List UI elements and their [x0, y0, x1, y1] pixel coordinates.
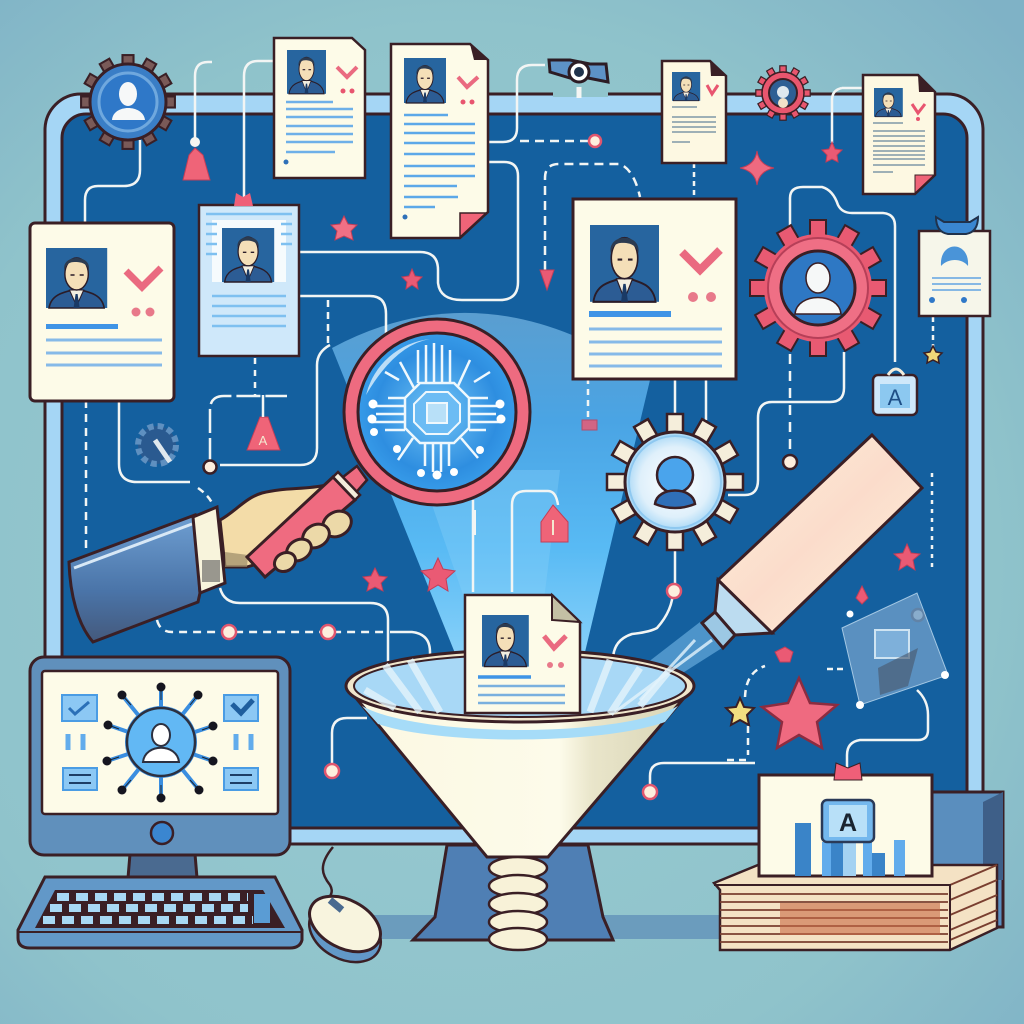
highlighter marker — [702, 435, 922, 648]
hand holding magnifier — [69, 472, 360, 642]
desk band — [370, 915, 730, 939]
computer mouse — [299, 847, 391, 974]
connector lines — [85, 61, 933, 786]
light beam — [332, 313, 650, 673]
connector nodes — [204, 135, 924, 799]
funnel spring — [489, 857, 547, 950]
icon: pink tag centre — [541, 505, 568, 542]
resume: top centre left — [274, 38, 365, 178]
icon: pink tag A: A — [259, 433, 268, 448]
resume: small blue hat card — [919, 217, 990, 316]
light rays from marker — [625, 622, 722, 700]
stars and gems on the screen — [331, 142, 920, 662]
stars: red large and yellow — [726, 678, 837, 748]
icon: lock A — [873, 369, 917, 415]
transparent document — [842, 593, 949, 709]
icon: silver gear with person — [607, 414, 743, 550]
resume: far top right — [863, 75, 935, 194]
badge A: A — [839, 809, 857, 837]
paper stack with chart — [714, 763, 1003, 950]
icon: lock A: A — [888, 385, 903, 410]
icon: small red gear — [756, 66, 810, 120]
icon: large red gear — [750, 220, 886, 356]
icon: pink tag A — [247, 395, 280, 450]
hub diagram — [102, 682, 218, 802]
keyboard — [18, 877, 302, 948]
badge A — [822, 800, 874, 842]
side widgets — [62, 695, 258, 790]
icon: gear top left — [81, 55, 175, 149]
resume: top centre — [391, 44, 488, 238]
resume entering funnel — [465, 595, 580, 713]
resume: left — [30, 223, 174, 401]
resume: large right — [573, 199, 736, 379]
icon: webcam — [549, 60, 608, 98]
magnifying glass — [343, 319, 530, 505]
resume: small top right — [662, 61, 726, 163]
star: yellow small — [924, 346, 942, 363]
large monitor stand — [413, 845, 613, 940]
resume: badge centre left — [199, 193, 299, 356]
panel: monitor screen — [45, 91, 983, 844]
icon: small wrench gear — [138, 426, 176, 464]
icon: tag top left — [183, 137, 210, 180]
small computer monitor — [30, 657, 290, 878]
icon: circuit chip — [372, 343, 500, 472]
funnel — [346, 595, 712, 950]
